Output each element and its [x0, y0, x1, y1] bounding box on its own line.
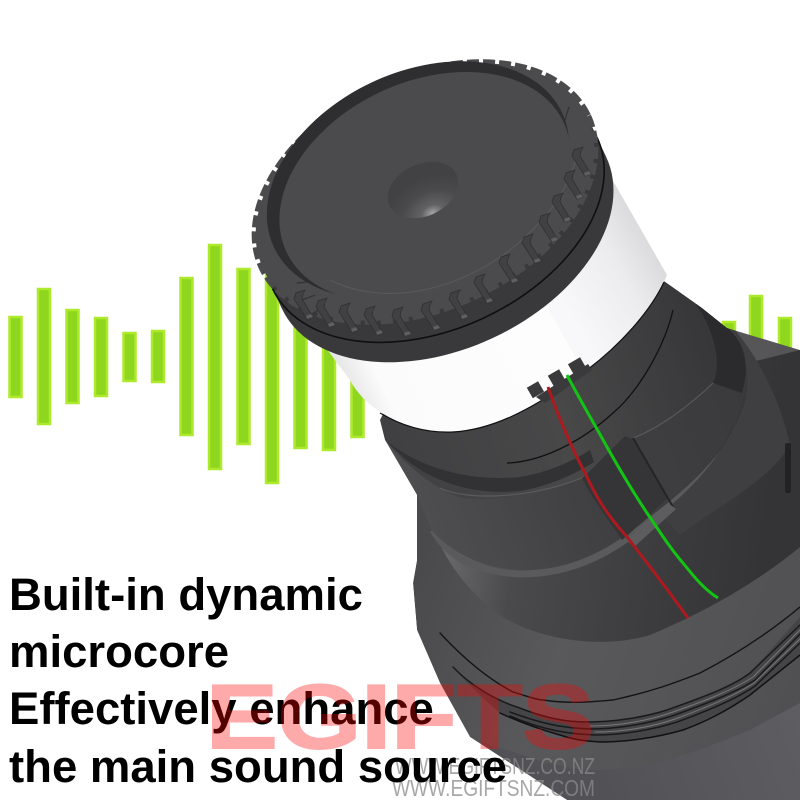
headline text: Effectively enhance: [9, 683, 434, 734]
connector notches: [527, 357, 592, 403]
thread lines: [440, 607, 800, 742]
base ring: [413, 328, 800, 770]
green wire: [567, 375, 718, 598]
headline text: Built-in dynamic: [9, 569, 363, 620]
rim edge: [330, 150, 578, 293]
dark band: [693, 300, 746, 393]
cavity opening: [430, 350, 800, 642]
red watermark logo: EGIFTS: [206, 667, 594, 768]
headline text: microcore: [9, 626, 229, 677]
sliding slot: [582, 436, 668, 540]
outer neck surface: [672, 328, 790, 507]
sound wave bars: [10, 245, 791, 483]
cap side wall: [233, 52, 655, 414]
center dome: [378, 151, 468, 229]
stripe: [440, 452, 608, 496]
red wire: [548, 387, 688, 618]
white cylinder: [328, 180, 667, 433]
seam line: [507, 310, 673, 463]
rim chevrons: [294, 147, 591, 336]
shoulder shadow: [388, 442, 594, 492]
thread band: [453, 617, 800, 742]
shoulder: [380, 281, 696, 496]
lower neck: [380, 282, 727, 566]
headline text: [9, 569, 507, 792]
body notch: [785, 443, 791, 493]
lower right panel: [470, 703, 800, 800]
grey watermark urls: [392, 753, 595, 800]
cap toothed rim: [213, 11, 637, 373]
cap face: [242, 27, 608, 347]
cap recess: [228, 15, 608, 345]
grey watermark urls: WWW.EGIFTSNZ.CO.NZ: [395, 753, 595, 779]
microphone illustration: [252, 59, 800, 800]
collar ring: [430, 451, 720, 578]
headline text: the main sound source: [9, 741, 507, 792]
